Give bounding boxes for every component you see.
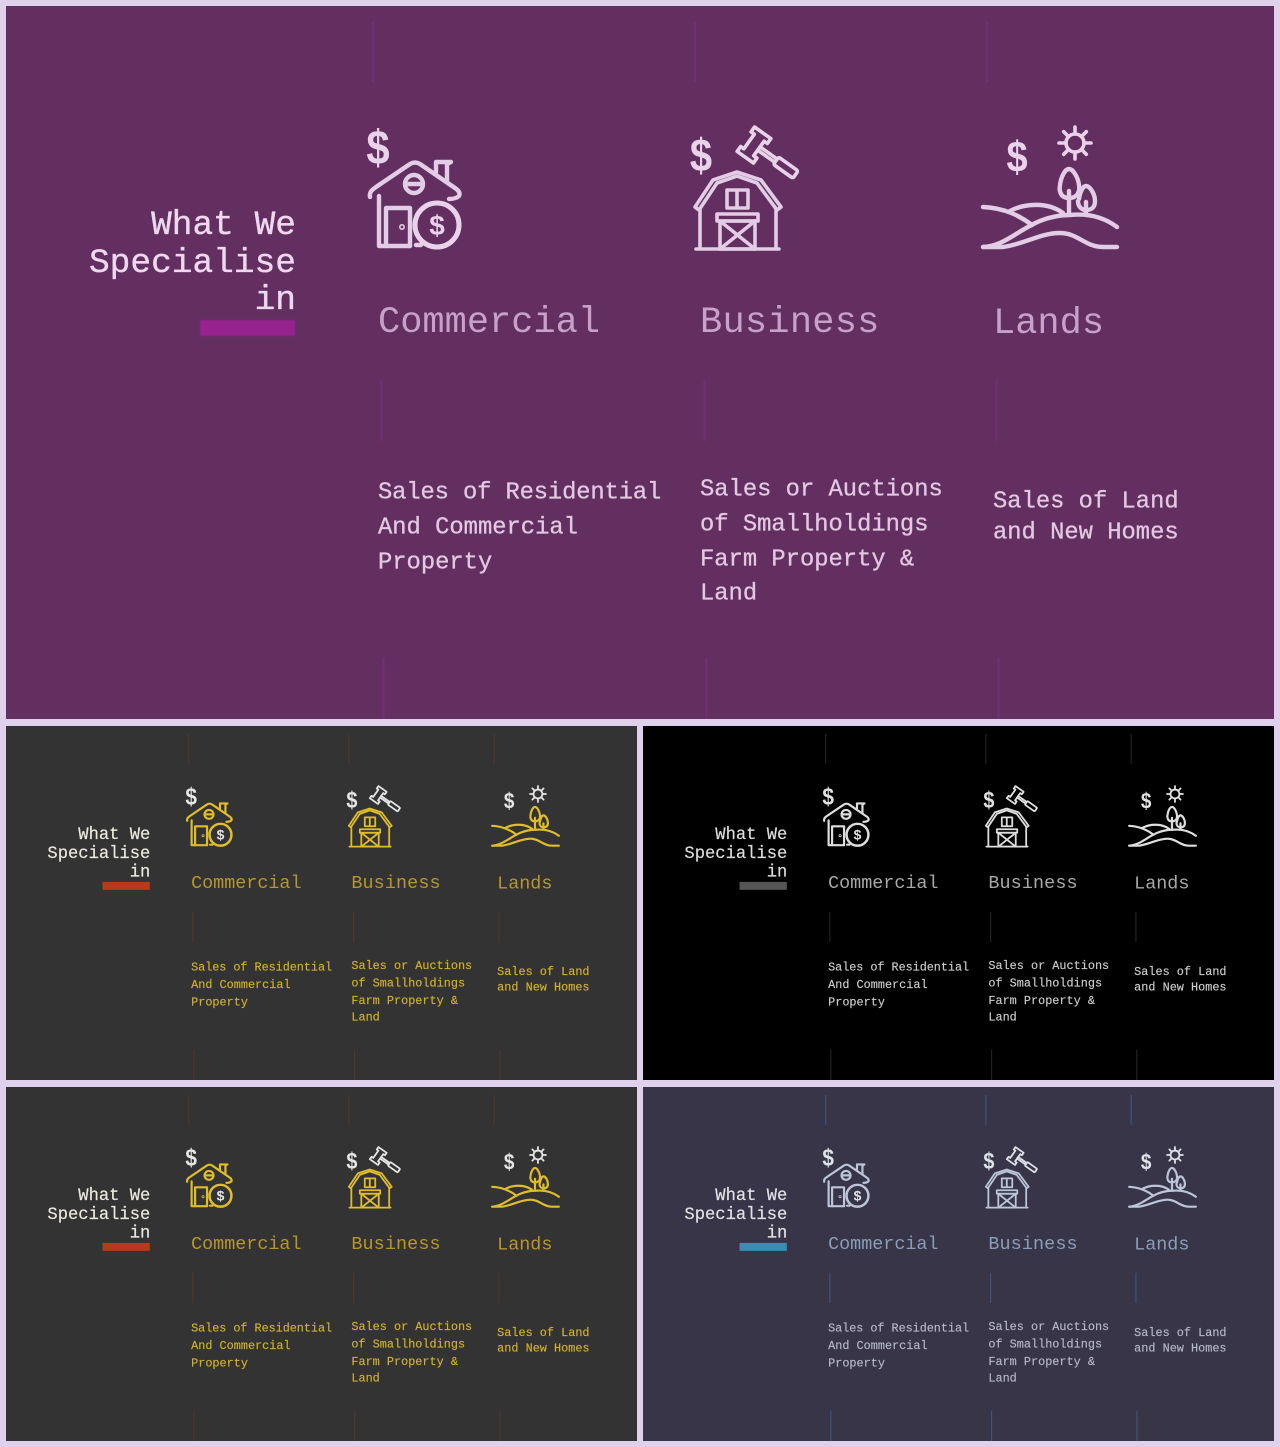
heading: what we specialise in: Specialise xyxy=(89,244,296,283)
text: commercial description: Property xyxy=(191,995,248,1009)
label: lands: Lands xyxy=(497,873,552,894)
icon: house with dollar coin: $ xyxy=(854,1188,862,1204)
heading: what we specialise in xyxy=(47,1187,150,1243)
icon: house with dollar coin: $ xyxy=(822,1144,834,1171)
text: lands description: and New Homes xyxy=(1134,1341,1227,1355)
icon: house with dollar coin: $ xyxy=(185,1144,197,1171)
text: business description: Sales or Auctions xyxy=(988,959,1109,973)
text: commercial description: And Commercial xyxy=(191,978,291,992)
icon: barn with gavel: $ xyxy=(346,788,357,813)
text: business description: Land xyxy=(700,580,757,608)
text: commercial description: And Commercial xyxy=(378,514,578,542)
text: business description xyxy=(351,1320,472,1386)
text: commercial description xyxy=(378,480,661,576)
heading: what we specialise in: What We xyxy=(78,826,150,845)
heading: what we specialise in: Specialise xyxy=(47,845,150,864)
text: business description xyxy=(988,959,1109,1025)
text: business description: Sales or Auctions xyxy=(700,476,943,504)
heading: what we specialise in: in xyxy=(255,281,296,320)
text: business description: Land xyxy=(351,1011,380,1025)
text: lands description: Sales of Land xyxy=(993,488,1179,516)
icon: barn with gavel: $ xyxy=(690,130,712,182)
text: commercial description: Sales of Residential xyxy=(191,961,332,975)
text: lands description: and New Homes xyxy=(1134,980,1227,994)
panel: purple main slide xyxy=(6,6,1274,719)
text: business description: Land xyxy=(988,1011,1017,1025)
text: commercial description: Sales of Residential xyxy=(828,1322,969,1336)
text: business description: Farm Property & xyxy=(351,1355,458,1369)
icon: barn with gavel: $ xyxy=(346,1149,357,1174)
icon: house with dollar coin xyxy=(822,783,869,846)
text: business description: Farm Property & xyxy=(988,1355,1095,1369)
text: commercial description: Property xyxy=(378,550,492,576)
text: business description xyxy=(988,1320,1109,1386)
text: lands description: Sales of Land xyxy=(1134,965,1227,979)
panel: dark yellow variant xyxy=(6,726,637,1080)
heading: what we specialise in: What We xyxy=(715,1187,787,1206)
text: business description xyxy=(351,959,472,1025)
heading: what we specialise in: Specialise xyxy=(47,1206,150,1225)
text: commercial description: And Commercial xyxy=(828,1339,928,1353)
icon: land with trees and sun: $ xyxy=(1006,132,1028,182)
icon: land with trees and sun xyxy=(492,1147,559,1207)
label: lands: Lands xyxy=(993,303,1104,345)
icon: house with dollar coin: $ xyxy=(854,827,862,843)
text: commercial description: Sales of Residential xyxy=(191,1322,332,1336)
text: business description xyxy=(700,476,943,608)
text: business description: Land xyxy=(351,1372,380,1386)
accent bar xyxy=(740,1243,787,1251)
heading: what we specialise in: in xyxy=(767,863,787,882)
heading: what we specialise in xyxy=(89,206,296,320)
icon: house with dollar coin xyxy=(185,783,232,846)
icon: land with trees and sun: $ xyxy=(1141,1151,1152,1175)
icon: house with dollar coin xyxy=(366,120,460,247)
text: business description: Sales or Auctions xyxy=(351,959,472,973)
text: commercial description: Property xyxy=(828,995,885,1009)
text: lands description: and New Homes xyxy=(993,520,1179,546)
text: business description: of Smallholdings xyxy=(351,976,465,990)
text: commercial description: Sales of Residential xyxy=(828,961,969,975)
label: commercial: Commercial xyxy=(828,873,939,894)
text: business description: of Smallholdings xyxy=(988,1337,1102,1351)
text: lands description xyxy=(497,965,590,994)
accent bar xyxy=(200,320,295,336)
heading: what we specialise in xyxy=(47,826,150,882)
label: business: Business xyxy=(988,873,1078,894)
icon: barn with gavel: $ xyxy=(983,1149,994,1174)
heading: what we specialise in: Specialise xyxy=(684,1206,787,1225)
label: commercial: Commercial xyxy=(378,302,600,344)
text: commercial description xyxy=(191,961,332,1009)
icon: land with trees and sun xyxy=(983,127,1117,247)
text: commercial description xyxy=(191,1322,332,1370)
text: lands description xyxy=(1134,965,1227,994)
label: business: Business xyxy=(700,302,880,344)
text: business description: Farm Property & xyxy=(700,546,914,574)
icon: barn with gavel xyxy=(983,786,1040,847)
label: lands: Lands xyxy=(1134,1234,1189,1255)
label: business: Business xyxy=(351,873,441,894)
text: commercial description: And Commercial xyxy=(828,978,928,992)
icon: land with trees and sun: $ xyxy=(1141,790,1152,814)
icon: land with trees and sun: $ xyxy=(504,790,515,814)
icon: house with dollar coin xyxy=(185,1144,232,1207)
text: lands description xyxy=(993,488,1179,546)
text: lands description: Sales of Land xyxy=(1134,1326,1227,1340)
text: commercial description: And Commercial xyxy=(191,1339,291,1353)
icon: house with dollar coin: $ xyxy=(822,783,834,810)
label: business: Business xyxy=(988,1234,1078,1255)
text: lands description: and New Homes xyxy=(497,980,590,994)
icon: land with trees and sun xyxy=(492,786,559,846)
icon: land with trees and sun: $ xyxy=(504,1151,515,1175)
text: business description: Sales or Auctions xyxy=(351,1320,472,1334)
icon: barn with gavel xyxy=(346,1147,403,1208)
icon: barn with gavel xyxy=(983,1147,1040,1208)
text: business description: Sales or Auctions xyxy=(988,1320,1109,1334)
text: lands description: Sales of Land xyxy=(497,965,590,979)
icon: barn with gavel xyxy=(346,786,403,847)
label: commercial: Commercial xyxy=(828,1234,939,1255)
icon: house with dollar coin xyxy=(822,1144,869,1207)
text: lands description xyxy=(497,1326,590,1355)
text: business description: Farm Property & xyxy=(988,994,1095,1008)
heading: what we specialise in: What We xyxy=(78,1187,150,1206)
label: lands: Lands xyxy=(1134,873,1189,894)
heading: what we specialise in xyxy=(684,1187,787,1243)
heading: what we specialise in xyxy=(684,826,787,882)
heading: what we specialise in: in xyxy=(767,1224,787,1243)
heading: what we specialise in: Specialise xyxy=(684,845,787,864)
icon: house with dollar coin: $ xyxy=(185,783,197,810)
text: commercial description: Property xyxy=(828,1356,885,1370)
icon: house with dollar coin: $ xyxy=(217,1188,225,1204)
accent bar xyxy=(103,1243,150,1251)
accent bar xyxy=(740,882,787,890)
heading: what we specialise in: What We xyxy=(151,206,296,245)
icon: barn with gavel xyxy=(690,127,804,249)
text: business description: Land xyxy=(988,1372,1017,1386)
icon: land with trees and sun xyxy=(1129,786,1196,846)
text: business description: of Smallholdings xyxy=(988,976,1102,990)
text: business description: of Smallholdings xyxy=(700,512,928,538)
label: lands: Lands xyxy=(497,1234,552,1255)
text: commercial description: Property xyxy=(191,1356,248,1370)
label: commercial: Commercial xyxy=(191,1234,302,1255)
panel: dark yellow variant, second xyxy=(6,1087,637,1441)
heading: what we specialise in: in xyxy=(130,1224,150,1243)
icon: house with dollar coin: $ xyxy=(429,210,445,241)
icon: land with trees and sun xyxy=(1129,1147,1196,1207)
panel: navy variant xyxy=(643,1087,1274,1441)
text: lands description: and New Homes xyxy=(497,1341,590,1355)
accent bar xyxy=(103,882,150,890)
label: business: Business xyxy=(351,1234,441,1255)
text: commercial description xyxy=(828,961,969,1009)
icon: house with dollar coin: $ xyxy=(217,827,225,843)
icon: house with dollar coin: $ xyxy=(366,120,390,175)
text: business description: Farm Property & xyxy=(351,994,458,1008)
text: business description: of Smallholdings xyxy=(351,1337,465,1351)
icon: barn with gavel: $ xyxy=(983,788,994,813)
heading: what we specialise in: What We xyxy=(715,826,787,845)
text: commercial description: Sales of Residential xyxy=(378,480,661,506)
heading: what we specialise in: in xyxy=(130,863,150,882)
text: lands description: Sales of Land xyxy=(497,1326,590,1340)
text: commercial description xyxy=(828,1322,969,1370)
text: lands description xyxy=(1134,1326,1227,1355)
panel: black monochrome variant xyxy=(643,726,1274,1080)
label: commercial: Commercial xyxy=(191,873,302,894)
